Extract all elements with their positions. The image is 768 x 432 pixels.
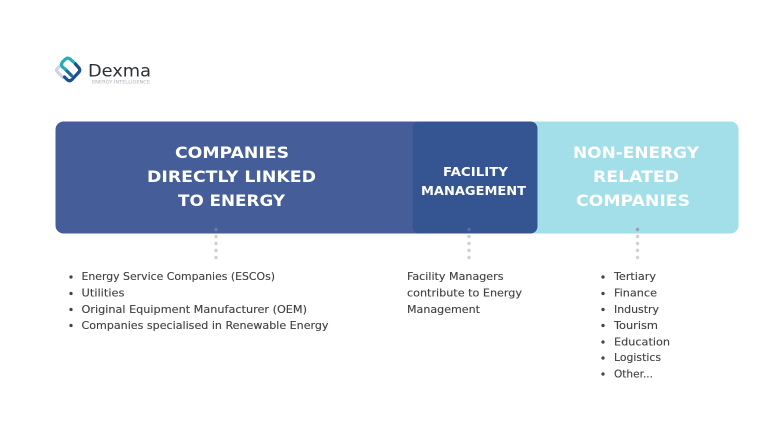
- heading: facility management: FACILITY: [443, 164, 509, 179]
- list: non-energy sectors: Logistics: [614, 352, 661, 364]
- heading: non-energy related companies: COMPANIES: [576, 191, 690, 210]
- list: non-energy sectors: Other...: [614, 368, 653, 380]
- heading: facility management: [421, 164, 526, 198]
- list: energy company types: Utilities: [82, 288, 124, 300]
- list: non-energy sectors: Education: [614, 336, 670, 348]
- text block: facility managers: contribute to Energy: [407, 288, 522, 300]
- list: non-energy sectors: Industry: [614, 304, 659, 316]
- list: energy company types: Energy Service Companies (ESCOs): [82, 271, 275, 283]
- list: energy company types: Original Equipment Manufacturer (OEM): [82, 304, 307, 316]
- list: energy company types: [69, 271, 329, 332]
- heading: companies directly linked to energy: [147, 143, 316, 210]
- connector: dotted line middle: [467, 228, 471, 259]
- list: non-energy sectors: Tourism: [613, 320, 658, 332]
- text block: facility managers: [407, 271, 522, 316]
- connector: dotted line left: [214, 228, 218, 259]
- panel: facility management overlap: [412, 122, 538, 234]
- logo: Dexma: [57, 58, 151, 84]
- heading: companies directly linked to energy: COMPANIES: [175, 143, 289, 162]
- text block: facility managers: Management: [407, 304, 480, 316]
- heading: non-energy related companies: RELATED: [593, 167, 679, 186]
- connector: dotted line right: [636, 228, 639, 259]
- icon: Dexma linked S mark: [57, 58, 80, 81]
- list: non-energy sectors: [601, 271, 670, 380]
- logo tagline: ENERGY INTELLIGENCE: [92, 80, 150, 84]
- logo wordmark: Dexma: [88, 62, 151, 80]
- list: non-energy sectors: Finance: [614, 288, 657, 300]
- heading: facility management: MANAGEMENT: [421, 183, 526, 198]
- panel: non-energy related companies: [400, 122, 738, 234]
- list: energy company types: Companies specialised in Renewable Energy: [82, 320, 328, 332]
- heading: companies directly linked to energy: DIRECTLY LINKED: [147, 167, 316, 186]
- heading: non-energy related companies: [573, 143, 699, 210]
- heading: companies directly linked to energy: TO ENERGY: [178, 191, 285, 210]
- heading: non-energy related companies: NON-ENERGY: [573, 143, 699, 162]
- text block: facility managers: Facility Managers: [407, 271, 504, 283]
- panel: companies directly linked to energy: [56, 122, 538, 234]
- list: non-energy sectors: Tertiary: [613, 271, 656, 283]
